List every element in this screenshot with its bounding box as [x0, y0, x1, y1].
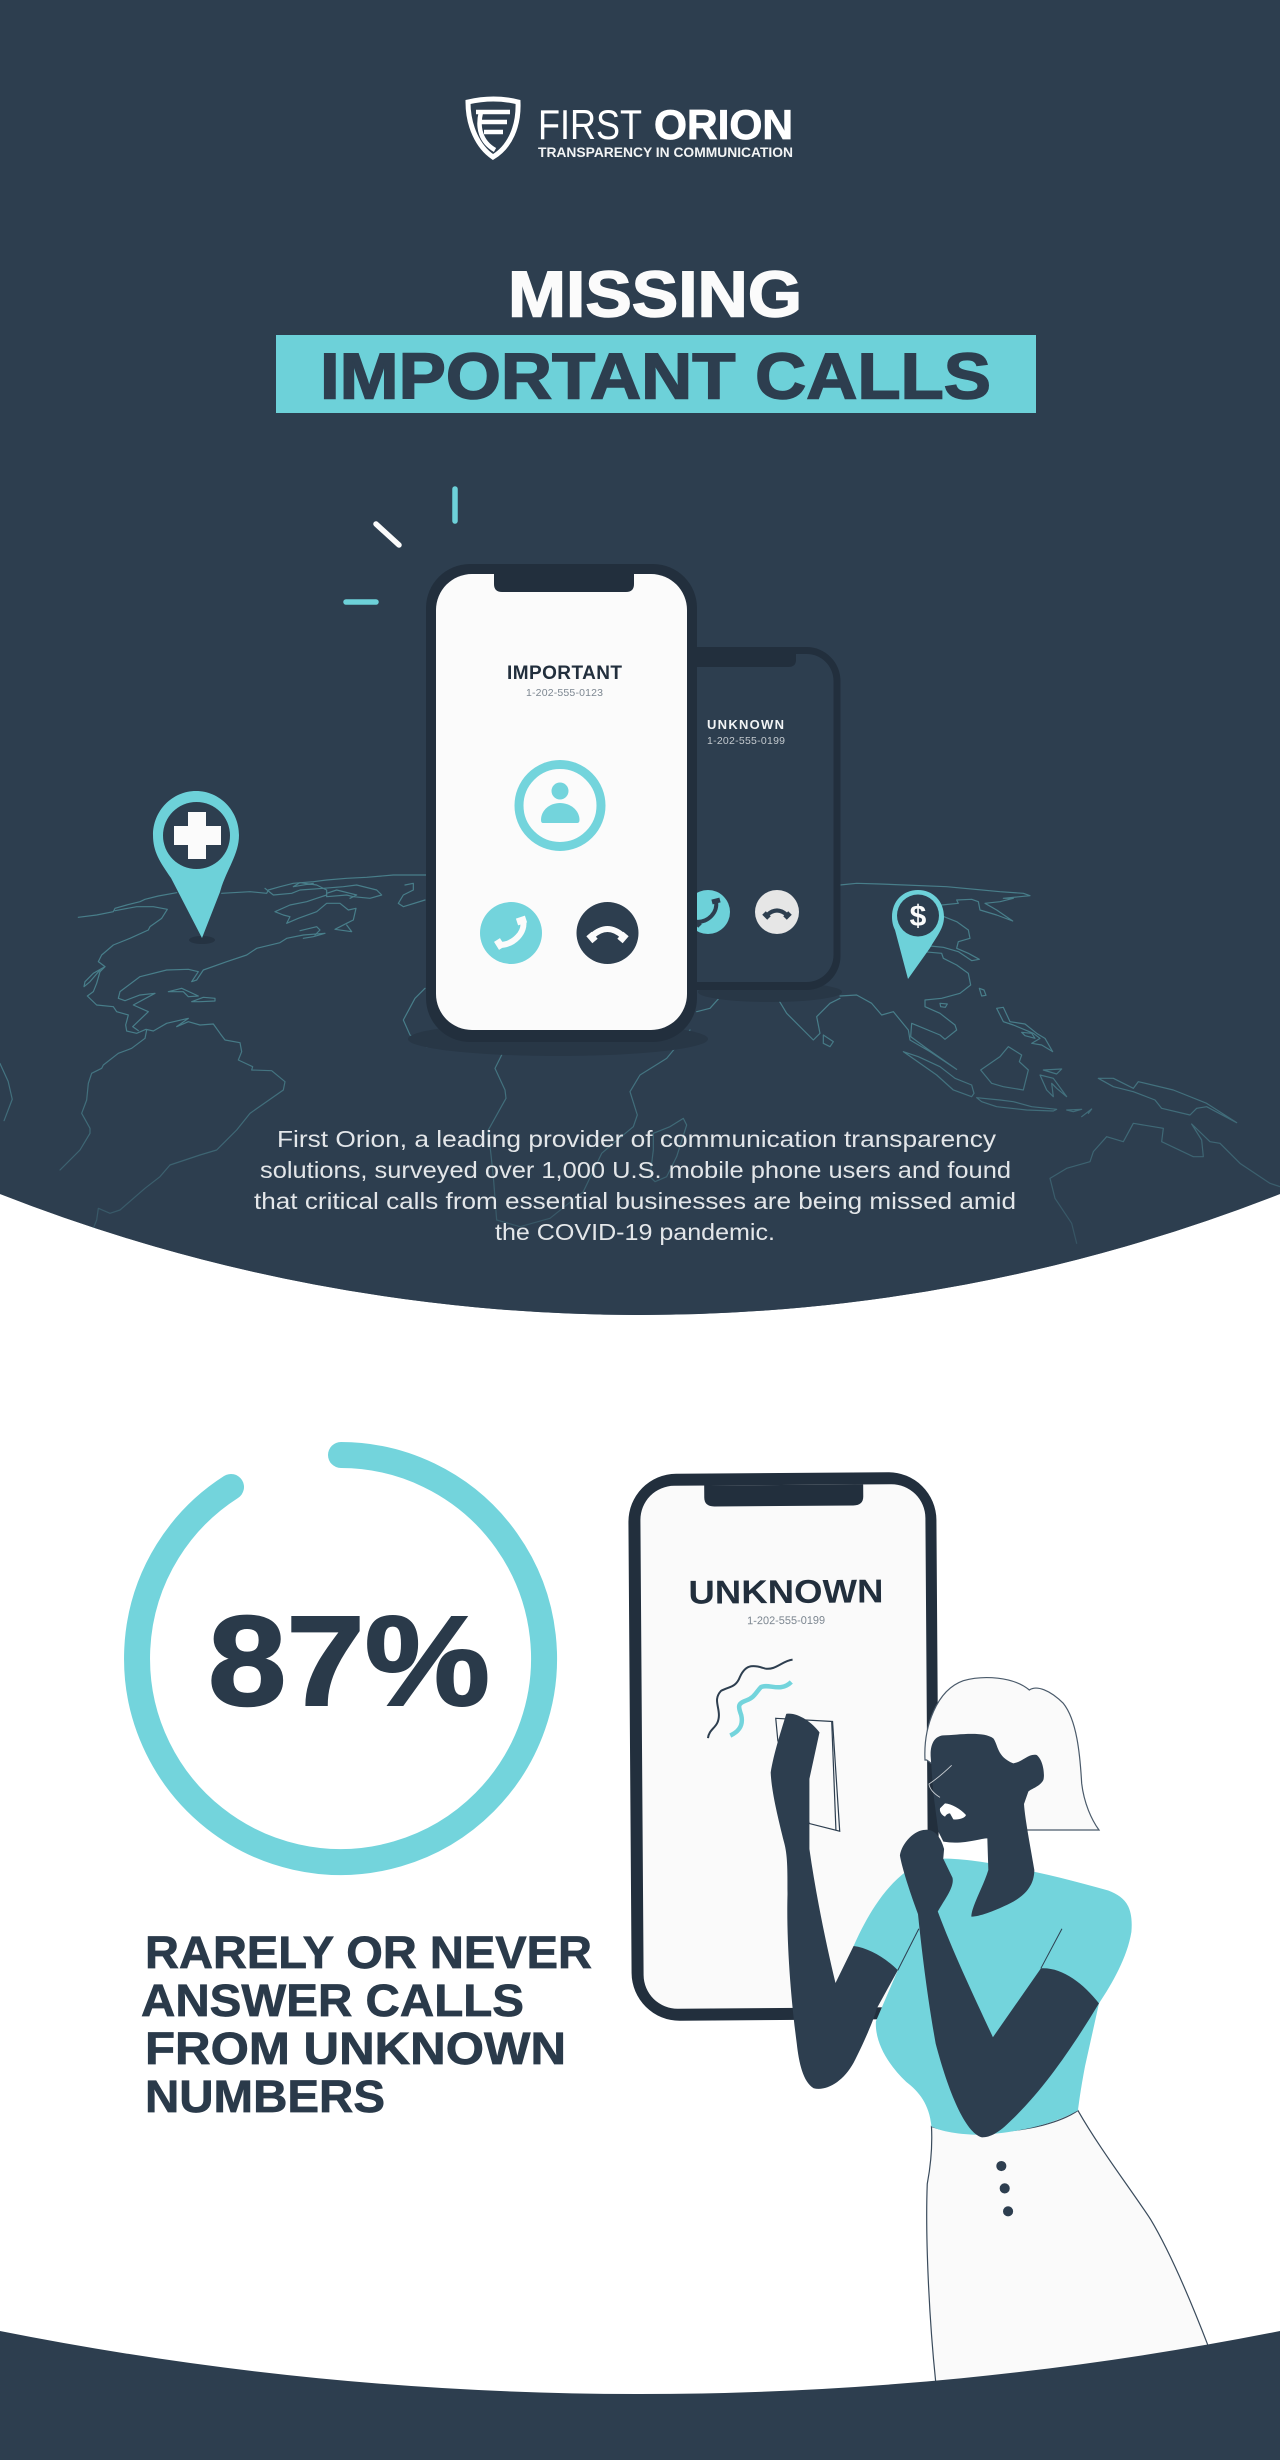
logo shield [468, 99, 518, 157]
nose line [929, 1765, 952, 1797]
mouth [940, 1803, 966, 1819]
large phone caller name: UNKNOWN [688, 1572, 884, 1611]
icon: contact avatar [519, 764, 601, 846]
large phone: unknown caller [628, 1472, 940, 2021]
pin: finance [892, 890, 944, 979]
back phone decline button [755, 890, 799, 934]
intro paragraph [254, 1126, 1016, 1245]
logo [468, 99, 793, 160]
skirt [927, 2111, 1218, 2410]
title line one: MISSING [508, 258, 802, 330]
book [776, 1718, 840, 1831]
logo: ORION [654, 101, 793, 148]
hero background [0, 0, 1280, 1315]
scribble marks [708, 1660, 793, 1738]
large phone number: 1-202-555-0199 [747, 1615, 825, 1627]
title banner: IMPORTANT CALLS [320, 340, 991, 412]
pin: medical [153, 791, 239, 944]
raised arm holding book [771, 1714, 898, 2089]
stat description: RARELY OR NEVER [145, 1927, 592, 1978]
front phone: important caller [408, 564, 708, 1056]
woman thinking at phone [708, 1660, 1218, 2410]
icon: decline button [576, 902, 638, 964]
progress ring 87 percent [137, 1455, 544, 1862]
intro paragraph: that critical calls from essential businesses are being missed amid [254, 1188, 1016, 1214]
notification sparks [346, 489, 455, 602]
stat number: 87% [208, 1590, 490, 1733]
arm at chin [900, 1830, 1099, 2137]
front phone caller name: IMPORTANT [507, 663, 622, 684]
world map outline [0, 875, 1280, 1320]
stat description: NUMBERS [145, 2071, 385, 2122]
stat description [141, 1927, 592, 2122]
intro paragraph: First Orion, a leading provider of communication transparency [277, 1126, 997, 1152]
logo wordmark: FIRST [538, 101, 642, 148]
front phone number: 1-202-555-0123 [526, 687, 603, 699]
back phone caller name: UNKNOWN [707, 717, 784, 732]
intro paragraph: the COVID-19 pandemic. [495, 1219, 775, 1245]
hair [925, 1678, 1099, 1830]
bottom band [0, 2331, 1280, 2460]
back phone number: 1-202-555-0199 [707, 735, 785, 747]
intro paragraph: solutions, surveyed over 1,000 U.S. mobile phone users and found [260, 1157, 1011, 1183]
skirt buttons [996, 2161, 1013, 2216]
shirt [854, 1859, 1132, 2135]
logo tagline: TRANSPARENCY IN COMMUNICATION [538, 145, 793, 160]
back phone answer button [686, 890, 730, 934]
icon: answer button [480, 902, 542, 964]
face and neck [931, 1734, 1044, 1917]
shirt fold lines [898, 1929, 1062, 1970]
stat description: ANSWER CALLS [141, 1975, 524, 2026]
back phone: unknown caller [640, 647, 842, 1002]
stat description: FROM UNKNOWN [145, 2023, 566, 2074]
pin: finance: $ [910, 900, 927, 933]
